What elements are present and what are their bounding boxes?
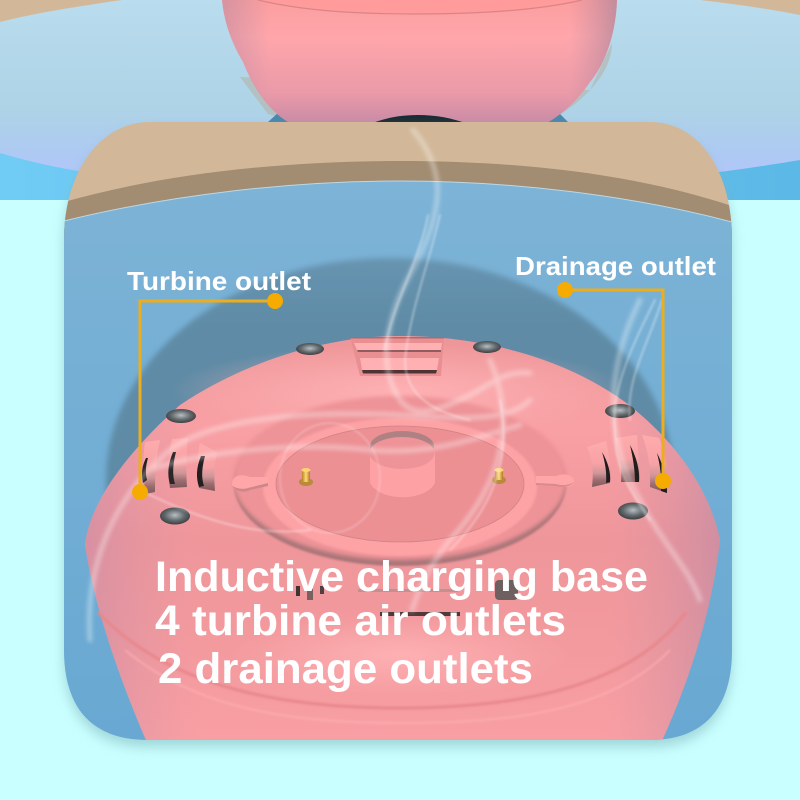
center hub (370, 431, 435, 497)
right contact pin (492, 468, 506, 484)
dark underside of bowl (376, 115, 462, 122)
blue feet (268, 114, 288, 122)
callout: turbine outlet: Turbine outlet (127, 266, 311, 296)
front connector details (296, 580, 518, 616)
pink base body (85, 336, 720, 745)
feature text: 4 turbine air outlets (155, 597, 566, 645)
left keyhole tab (232, 475, 268, 492)
pink bowl (222, 0, 617, 124)
charging recess (233, 396, 567, 566)
right keyhole tab (536, 474, 574, 487)
turbine outlets right (587, 435, 667, 493)
top vent (350, 337, 444, 376)
feature text: 2 drainage outlets (158, 645, 533, 693)
glass lens screws (160, 341, 648, 524)
steam wisps (89, 130, 700, 640)
turbine outlets left (142, 438, 217, 494)
callout: drainage outlet: Drainage outlet (515, 251, 716, 281)
callout: drainage outlet (515, 251, 716, 489)
lower rim groove (98, 612, 686, 708)
tan table and water well (64, 122, 732, 745)
main panel: close-up of base (64, 122, 732, 747)
shadow of base (104, 256, 674, 492)
top scene: upper product view (0, 0, 800, 200)
left contact pin (299, 468, 313, 486)
feature text: Inductive charging base (155, 553, 648, 601)
bowl shadow (240, 43, 612, 124)
callout: turbine outlet (127, 266, 311, 500)
feature text (155, 553, 648, 693)
